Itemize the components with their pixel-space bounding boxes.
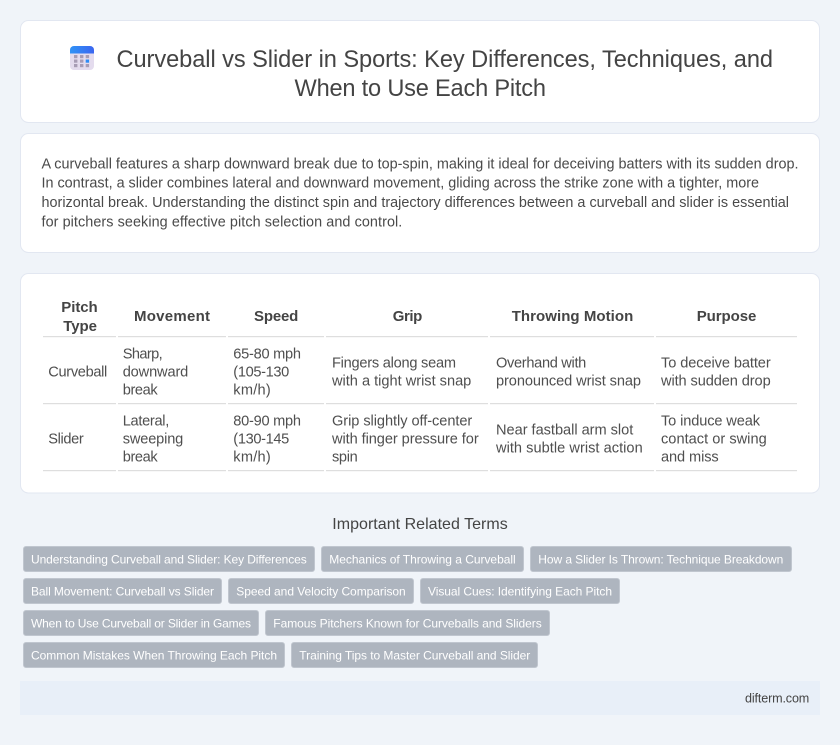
table row: slider: km/h) xyxy=(233,449,271,465)
table header row xyxy=(43,299,797,337)
title: Curveball vs Slider in Sports: Key Differences, Techniques, and xyxy=(116,47,773,73)
tag: ball movement: Ball Movement: Curveball vs Slider xyxy=(31,584,214,598)
table row: slider: with subtle wrist action xyxy=(495,440,643,456)
table row: slider: Near fastball arm slot xyxy=(496,422,633,438)
table row: curveball: To deceive batter xyxy=(661,355,771,371)
table row: slider: spin xyxy=(332,449,358,465)
table row: curveball: Sharp, xyxy=(123,346,163,362)
panel: related term tags xyxy=(24,546,792,668)
table row: slider: 80-90 mph xyxy=(233,413,301,429)
tag: training tips xyxy=(292,642,538,668)
table header row: Speed xyxy=(254,308,298,325)
table row: curveball: Curveball xyxy=(48,364,107,380)
table row: slider: break xyxy=(123,449,158,465)
tag: when to use: When to Use Curveball or Slider in Games xyxy=(31,616,251,630)
tag: visual cues: Visual Cues: Identifying Each Pitch xyxy=(428,584,612,598)
tag: common mistakes: Common Mistakes When Throwing Each Pitch xyxy=(31,648,277,662)
table row: curveball: 65-80 mph xyxy=(233,346,301,362)
tag: speed comparison xyxy=(228,578,414,604)
tag: ball movement xyxy=(24,578,222,604)
table header row: Grip xyxy=(393,308,422,325)
tag: mechanics xyxy=(322,546,524,572)
table row: curveball: downward xyxy=(123,364,188,380)
table row: slider: Grip slightly off-center xyxy=(332,413,472,429)
footer: difterm.com xyxy=(745,691,809,705)
table row: slider: Lateral, xyxy=(123,413,169,429)
tag: key differences xyxy=(24,546,314,572)
tag: mechanics: Mechanics of Throwing a Curveball xyxy=(329,552,516,566)
footer xyxy=(20,681,820,715)
text block: description: horizontal break. Understanding the distinct spin and trajectory differences between a curveball and slider is essential xyxy=(42,195,789,211)
table row: slider xyxy=(43,413,797,471)
table row: curveball: (105-130 xyxy=(233,364,289,380)
panel: intro paragraph xyxy=(20,134,820,252)
table row: curveball: with sudden drop xyxy=(660,373,771,389)
tag: visual cues xyxy=(420,578,620,604)
table row: slider: contact or swing xyxy=(661,431,767,447)
text block: description: In contrast, a slider combines lateral and downward movement, gliding across the strike zone with a tighter, more xyxy=(42,176,759,192)
icon: calendar xyxy=(70,46,94,70)
table row: curveball: km/h) xyxy=(233,382,271,398)
table header row: Type xyxy=(63,318,97,335)
text block: description: for pitchers seeking effective pitch selection and control. xyxy=(42,214,402,230)
table row: slider: and miss xyxy=(661,449,719,465)
tag: speed comparison: Speed and Velocity Comparison xyxy=(236,584,406,598)
tag: famous pitchers: Famous Pitchers Known for Curveballs and Sliders xyxy=(273,616,542,630)
table row: curveball: break xyxy=(123,382,158,398)
table row: curveball: Overhand with xyxy=(496,355,586,371)
table row: curveball: pronounced wrist snap xyxy=(496,373,641,389)
heading: important related terms: Important Related Terms xyxy=(332,516,508,533)
table row: slider: with finger pressure for xyxy=(331,431,479,447)
title xyxy=(116,47,773,102)
table header row: Pitch xyxy=(61,299,98,316)
tag: when to use xyxy=(24,610,258,636)
table header row: Movement xyxy=(134,308,210,325)
table row: curveball xyxy=(43,346,797,404)
table row: slider: To induce weak xyxy=(661,413,761,429)
table header row: Throwing Motion xyxy=(512,308,633,325)
panel: comparison table xyxy=(20,274,820,493)
panel: header xyxy=(20,20,820,122)
table row: slider: Slider xyxy=(48,431,84,447)
tag: famous pitchers xyxy=(266,610,550,636)
table row: curveball: Fingers along seam xyxy=(332,355,456,371)
table row: slider: (130-145 xyxy=(233,431,289,447)
tag: slider technique: How a Slider Is Thrown: Technique Breakdown xyxy=(538,552,783,566)
table row: slider: sweeping xyxy=(123,431,183,447)
tag: slider technique xyxy=(530,546,792,572)
tag: training tips: Training Tips to Master Curveball and Slider xyxy=(299,648,530,662)
tag: common mistakes xyxy=(24,642,284,668)
tag: key differences: Understanding Curveball and Slider: Key Differences xyxy=(31,552,307,566)
table row: curveball: with a tight wrist snap xyxy=(331,373,471,389)
text block: description: A curveball features a sharp downward break due to top-spin, making it ideal for deceiving batters with its sudden drop. xyxy=(42,156,798,172)
text block: description xyxy=(42,156,798,230)
table header row: Purpose xyxy=(697,308,756,325)
title: When to Use Each Pitch xyxy=(294,76,546,102)
